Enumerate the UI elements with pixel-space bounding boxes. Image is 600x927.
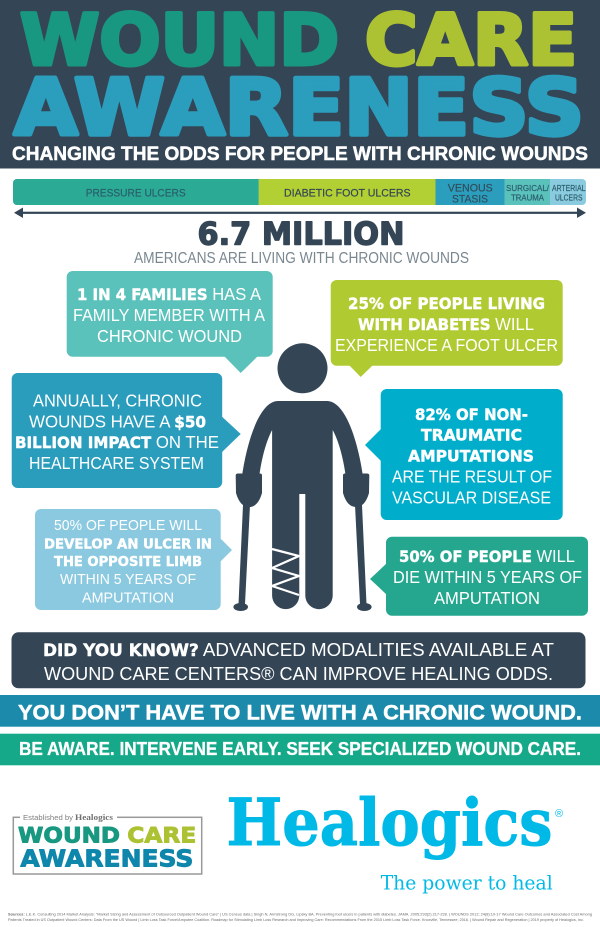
callout: 25% of people with diabetes: WITH DIABETES WILL: [358, 314, 534, 334]
logo: wound care awareness badge: WOUND: [18, 824, 120, 848]
callout: 82% of amputations: [365, 389, 563, 520]
sources footnote: Sources: L.E.K. Consulting 2014 Market Analysis: "Market Sizing and Assessment of Outsourced Outpatient Wound Care" | US Census data | Singh N, Armstrong DG, Lipsky BA. Preventing foot ulcers in patients with diabetes. JAMA. 2005;293(2):217-228. | WOUNDS 2012; 24(8):10-17 Wound Care Outcomes and Associated Cost Among: [8, 913, 592, 917]
callout: ulcer in opposite limb: WITHIN 5 YEARS OF: [60, 571, 196, 588]
logo: wound care awareness badge: CARE: [127, 824, 196, 848]
callout: 82% of amputations: TRAUMATIC: [421, 426, 522, 445]
callout: 50% of people will die: DIE WITHIN 5 YEARS OF: [393, 567, 582, 587]
logo: wound care awareness badge: AWARENESS: [20, 846, 193, 872]
callout: ulcer in opposite limb: [35, 509, 232, 610]
panel: did you know: [12, 632, 586, 688]
title: wound care awareness: [14, 0, 584, 154]
callout: 50 billion impact: ANNUALLY, CHRONIC: [33, 391, 202, 411]
callout: 50 billion impact: BILLION IMPACT ON THE: [15, 432, 219, 452]
callout: 1 in 4 families: FAMILY MEMBER WITH A: [73, 305, 265, 325]
callout: 50% of people will die: AMPUTATION: [434, 588, 540, 608]
logo: healogics: ®: [555, 808, 563, 820]
callout: ulcer in opposite limb: THE OPPOSITE LIMB: [54, 554, 202, 570]
stacked bar: chronic wound types: SURGICAL/: [506, 183, 550, 193]
logo: healogics: [226, 785, 563, 894]
callout: 82% of amputations: ARE THE RESULT OF: [392, 467, 552, 487]
stacked bar: chronic wound types: [13, 179, 586, 205]
callout: 50% of people will die: [370, 537, 588, 616]
title: wound care awareness: AWARENESS: [14, 64, 584, 154]
callout: 1 in 4 families: CHRONIC WOUND: [97, 326, 242, 346]
title: wound care awareness: CARE: [365, 0, 577, 82]
callout: 1 in 4 families: [67, 271, 273, 373]
tagline: The power to heal: [381, 871, 553, 894]
stacked bar: chronic wound types: PRESSURE ULCERS: [86, 188, 186, 200]
title: wound care awareness: WOUND: [20, 0, 339, 82]
callout: 82% of amputations: AMPUTATIONS: [408, 447, 534, 466]
panel: did you know: DID YOU KNOW? ADVANCED MODALITIES AVAILABLE AT: [43, 639, 554, 660]
logo: wound care awareness badge: Established by: [23, 815, 74, 822]
arrow: bar span: [14, 208, 586, 218]
callout: 25% of people with diabetes: [331, 280, 563, 377]
stacked bar: chronic wound types: TRAUMA: [511, 193, 544, 203]
callout: ulcer in opposite limb: AMPUTATION: [82, 590, 174, 607]
subtitle: CHANGING THE ODDS FOR PEOPLE WITH CHRONIC WOUNDS: [12, 144, 588, 165]
stacked bar: chronic wound types: DIABETIC FOOT ULCERS: [284, 188, 411, 200]
callout: 82% of amputations: VASCULAR DISEASE: [392, 487, 551, 507]
callout: ulcer in opposite limb: 50% OF PEOPLE WILL: [54, 517, 202, 534]
logo: healogics: Healogics: [226, 785, 552, 861]
banner: you don't have to live with a chronic wound: [0, 695, 600, 727]
icon: person on crutches with bandaged leg: [233, 343, 372, 611]
logo: wound care awareness badge: [13, 812, 202, 874]
banner: be aware: [0, 734, 600, 765]
callout: 1 in 4 families: 1 IN 4 FAMILIES HAS A: [77, 284, 261, 304]
big number: 6.7 million: 6.7 MILLION: [198, 216, 404, 252]
callout: ulcer in opposite limb: DEVELOP AN ULCER IN: [44, 536, 212, 552]
caption: americans living with chronic wounds: AMERICANS ARE LIVING WITH CHRONIC WOUNDS: [134, 250, 469, 267]
header banner: [0, 0, 600, 168]
callout: 50 billion impact: [12, 373, 241, 488]
sources footnote: Patients Treated in US Outpatient Wound Centers: Data From the US Wound | Limb Loss Task Force/Amputee Coalition. Roadmap for Stimulating Limb Loss Research and Improving Care: Recommendations From the 2015 Limb Loss Task Force. Knoxville, Tennessee; 2016. | Wound Repair and Regeneration | 2019 property of Healogics, Inc.: [8, 918, 584, 922]
stacked bar: chronic wound types: ARTERIAL: [552, 183, 586, 193]
callout: 25% of people with diabetes: EXPERIENCE A FOOT ULCER: [335, 335, 558, 355]
banner: be aware: BE AWARE. INTERVENE EARLY. SEEK SPECIALIZED WOUND CARE.: [19, 739, 581, 759]
callout: 50 billion impact: WOUNDS HAVE A $50: [29, 412, 206, 432]
callout: 50 billion impact: HEALTHCARE SYSTEM: [29, 453, 204, 473]
callout: 50% of people will die: 50% OF PEOPLE WILL: [399, 546, 575, 566]
sources footnote: [8, 913, 592, 922]
panel: did you know: WOUND CARE CENTERS® CAN IMPROVE HEALING ODDS.: [44, 663, 553, 684]
callout: 25% of people with diabetes: 25% OF PEOPLE LIVING: [348, 294, 545, 313]
stacked bar: chronic wound types: VENOUS: [448, 183, 493, 195]
stacked bar: chronic wound types: STASIS: [452, 193, 488, 205]
logo: wound care awareness badge: Healogics: [75, 813, 113, 822]
callout: 82% of amputations: 82% OF NON-: [415, 405, 528, 424]
banner: you don't have to live with a chronic wound: YOU DON’T HAVE TO LIVE WITH A CHRONIC WOUND.: [18, 701, 582, 724]
stacked bar: chronic wound types: ULCERS: [555, 193, 583, 203]
